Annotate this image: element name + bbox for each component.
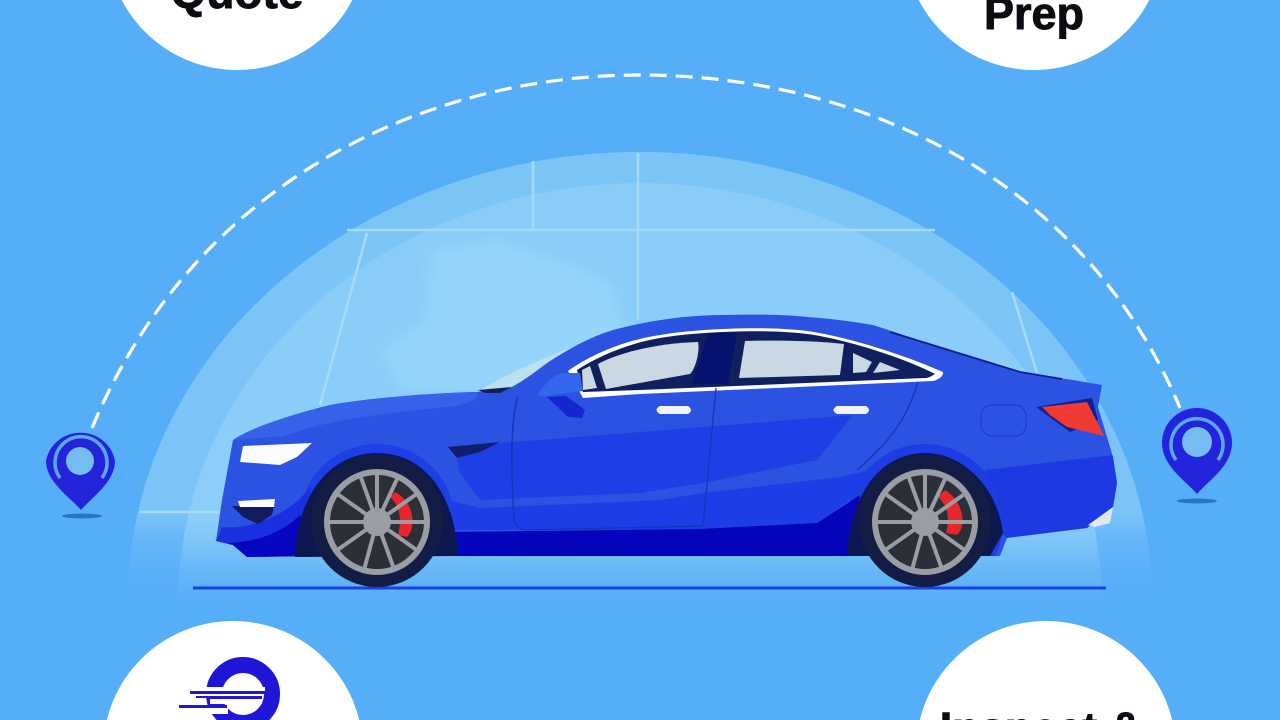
bottom sill bbox=[440, 495, 860, 560]
front arch rim bbox=[304, 444, 452, 511]
handles bbox=[656, 406, 869, 414]
car body bbox=[216, 315, 1117, 557]
brake caliper bbox=[390, 492, 413, 537]
hood highlight bbox=[233, 392, 478, 440]
body shading layers bbox=[216, 392, 1117, 557]
rear bumper light bbox=[1088, 507, 1113, 527]
mirror shadow bbox=[547, 396, 585, 418]
tail light shadow bbox=[1036, 398, 1098, 432]
rear arch rim bbox=[850, 444, 1002, 556]
fuel cap bbox=[981, 405, 1026, 436]
window pillar bbox=[692, 333, 737, 384]
front bumper lower bbox=[216, 488, 310, 557]
circle: Inspect bbox=[916, 621, 1176, 720]
icon: fast globe bbox=[179, 665, 272, 720]
side panel bbox=[457, 415, 853, 500]
protective dome bbox=[128, 152, 1152, 603]
door lines bbox=[512, 382, 918, 530]
mirror bbox=[537, 373, 583, 396]
rear wheel bbox=[859, 455, 991, 587]
headlight bbox=[240, 443, 312, 465]
brake caliper bbox=[938, 490, 963, 535]
rear pane bbox=[739, 341, 844, 378]
lower door band bbox=[447, 470, 870, 530]
fog lamp bbox=[232, 506, 274, 524]
circle: speed icon bbox=[103, 621, 363, 720]
quarter panes bbox=[853, 353, 900, 373]
window frame bbox=[568, 328, 943, 398]
car bbox=[216, 315, 1120, 600]
pin: destination bbox=[1162, 408, 1232, 504]
front pane bbox=[598, 342, 699, 389]
vent pane bbox=[582, 366, 597, 390]
pin: origin bbox=[46, 433, 115, 518]
side vent bbox=[448, 442, 500, 458]
glimpse through windshield bbox=[480, 330, 640, 395]
ground line bbox=[193, 586, 1106, 590]
circle: Quote bbox=[107, 0, 367, 70]
rear lower band bbox=[985, 455, 1120, 538]
dashed route arc bbox=[92, 75, 1180, 428]
tail light bbox=[1042, 402, 1104, 436]
rear arch bbox=[847, 453, 1003, 556]
front wheel bbox=[311, 455, 443, 587]
rear deck line bbox=[890, 332, 1062, 379]
window glass dark bbox=[577, 331, 935, 392]
circle: Prep bbox=[904, 0, 1164, 70]
front arch bbox=[295, 453, 458, 557]
windshield wedge bbox=[478, 387, 512, 393]
chin bbox=[228, 515, 301, 557]
